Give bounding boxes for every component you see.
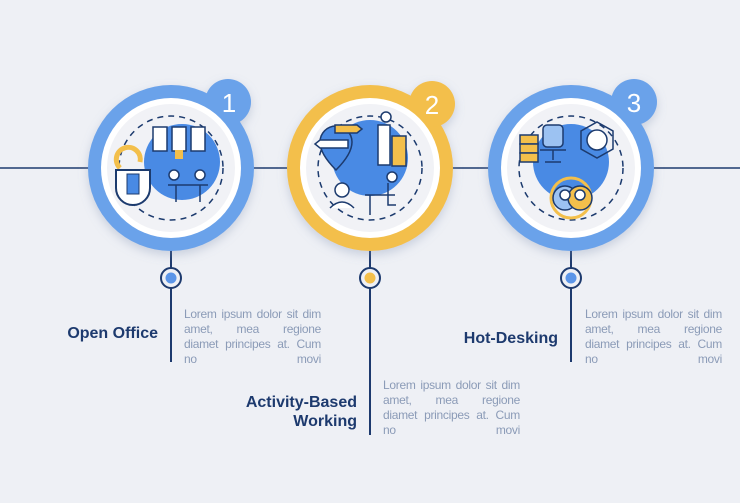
- text: step 3: no movi: [585, 352, 722, 366]
- text: step 2: Lorem ipsum dolor sit dim: [383, 378, 520, 392]
- text: step 1: diamet principes at. Cum: [184, 337, 321, 351]
- text: step 2: diamet principes at. Cum: [383, 408, 520, 422]
- label: Hot-Desking: Hot-Desking: [464, 330, 558, 347]
- text: step 3: [585, 307, 722, 366]
- text: step 1: no movi: [184, 352, 321, 366]
- label: Open Office: Open Office: [67, 325, 158, 342]
- text: step 3: amet, mea regione: [585, 322, 722, 336]
- text: step 1: amet, mea regione: [184, 322, 321, 336]
- timeline line: [0, 167, 740, 169]
- text: step 3: diamet principes at. Cum: [585, 337, 722, 351]
- text: step 1: Lorem ipsum dolor sit dim: [184, 307, 321, 321]
- step 1 circle: [88, 79, 254, 251]
- marker dots: [161, 268, 581, 288]
- vertical connectors: [171, 250, 571, 435]
- text: step 1: [184, 307, 321, 366]
- text: step 2: [383, 378, 520, 437]
- step 3 circle: 3: [627, 88, 641, 118]
- label: Activity-Based Working: Working: [293, 413, 357, 430]
- label: Activity-Based Working: Activity-Based: [246, 394, 357, 411]
- text: step 2: amet, mea regione: [383, 393, 520, 407]
- text: step 2: no movi: [383, 423, 520, 437]
- label: Activity-Based Working: [246, 394, 357, 430]
- step 2 circle: 2: [425, 90, 439, 120]
- text: step 3: Lorem ipsum dolor sit dim: [585, 307, 722, 321]
- step 2 circle: [287, 81, 455, 251]
- step 3 circle: [488, 79, 657, 251]
- step 1 circle: 1: [222, 88, 236, 118]
